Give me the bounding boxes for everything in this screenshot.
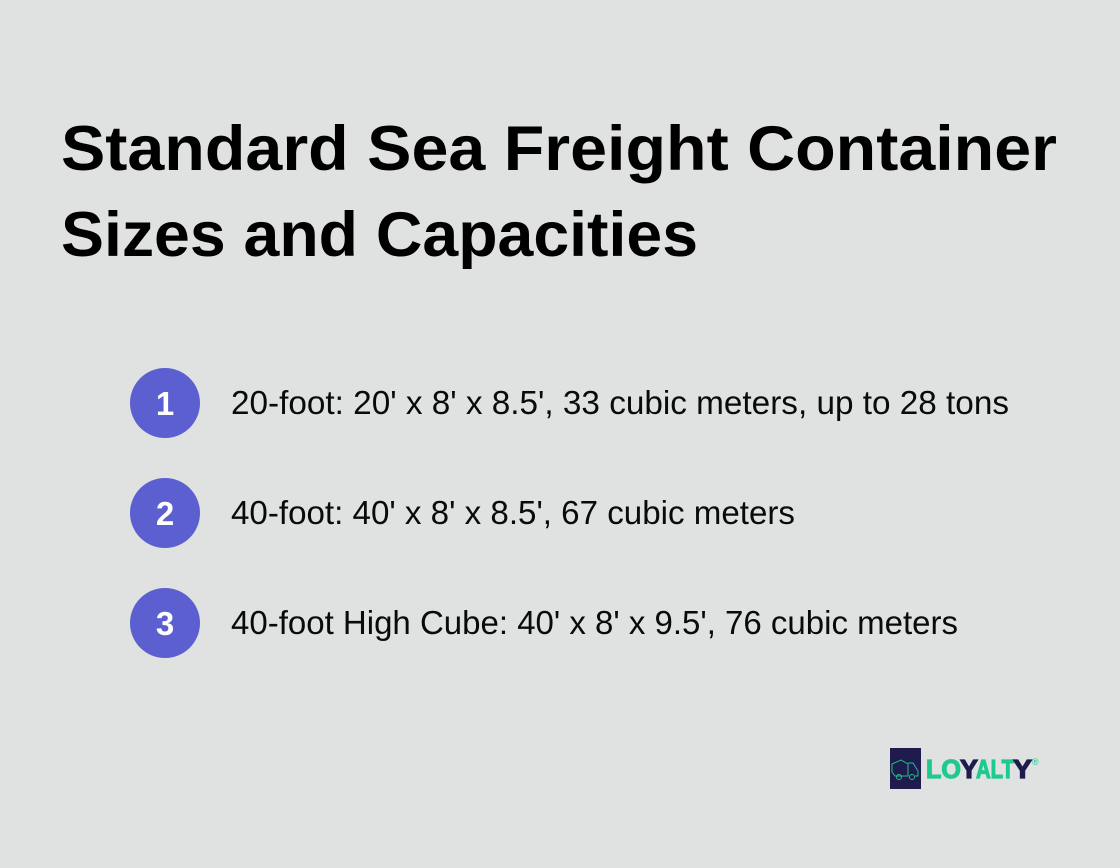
number badge 1: 1 <box>156 385 174 422</box>
logo wordmark <box>926 754 1039 784</box>
number badge 3: 3 <box>156 605 174 642</box>
logo wordmark: ® <box>1032 757 1039 767</box>
title: Standard Sea Freight Container <box>61 114 1057 184</box>
number badge 2: 2 <box>156 495 174 532</box>
item 3 text: 40-foot High Cube: 40' x 8' x 9.5', 76 cubic meters <box>231 604 958 641</box>
logo wordmark: Y <box>960 754 978 784</box>
title <box>61 114 1057 270</box>
list item 2 <box>130 478 795 548</box>
logo wordmark: ALT <box>976 754 1014 784</box>
title: Sizes and Capacities <box>61 200 698 270</box>
logo: Loyalty <box>890 748 1039 789</box>
logo wordmark: LO <box>926 754 961 784</box>
list item 1 <box>130 368 1009 438</box>
item 2 text: 40-foot: 40' x 8' x 8.5', 67 cubic meters <box>231 494 795 531</box>
number badge 3 <box>130 588 200 658</box>
list item 3 <box>130 588 958 658</box>
number badge 2 <box>130 478 200 548</box>
item 1 text: 20-foot: 20' x 8' x 8.5', 33 cubic meters, up to 28 tons <box>231 384 1009 421</box>
logo wordmark: Y <box>1013 754 1032 784</box>
number badge 1 <box>130 368 200 438</box>
icon: truck <box>890 748 921 789</box>
